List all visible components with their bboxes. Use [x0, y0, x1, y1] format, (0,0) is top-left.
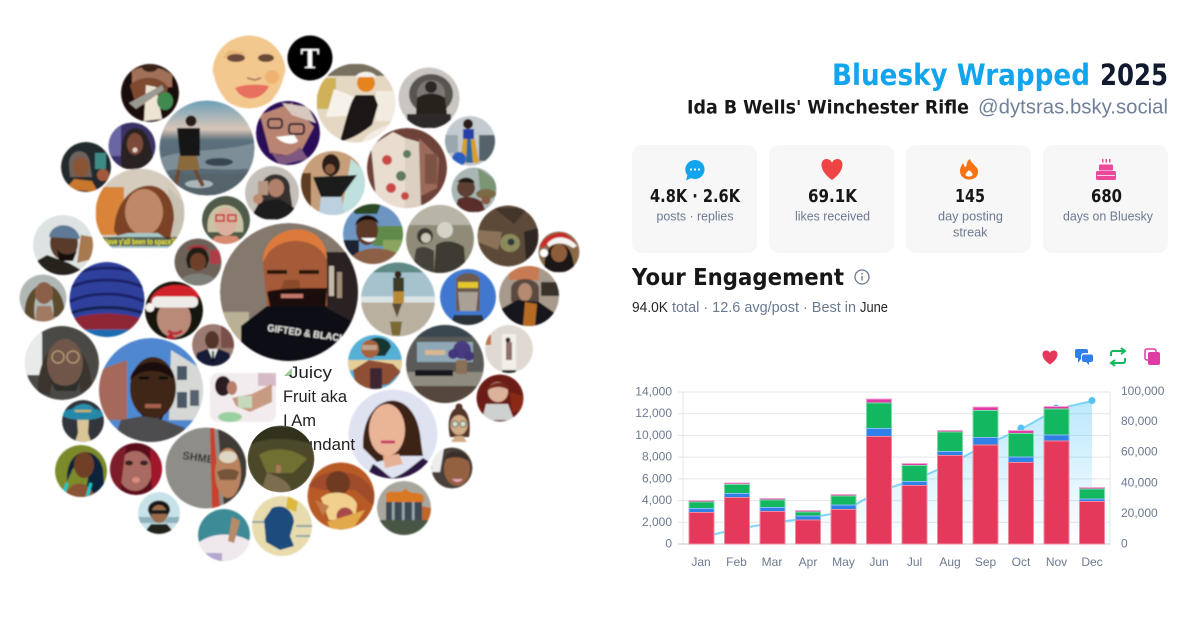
subtitle: display name and handle — [687, 96, 1168, 118]
avatar: woman in black blouse — [301, 151, 365, 215]
icon: flame — [960, 159, 978, 180]
engagement summary text: June — [860, 300, 888, 316]
title: Bluesky Wrapped — [832, 58, 1090, 92]
avatar: cartoon woman in santa hat — [538, 232, 580, 272]
avatar: woman with red hair — [110, 443, 162, 495]
avatar: smiling woman in room — [174, 238, 222, 286]
avatar: smiling woman close-up — [432, 448, 472, 488]
bar: Jan — [689, 500, 714, 544]
bar: Feb — [724, 483, 750, 544]
left axis labels: 2,000 — [642, 515, 672, 529]
avatar: man on beach — [361, 262, 435, 336]
avatar: tabby cat — [478, 206, 538, 266]
avatar: curly haired woman — [20, 274, 66, 322]
avatar: woman with machete — [121, 62, 179, 122]
avatar: woman portrait — [348, 390, 438, 479]
avatar: reclining woman, rounded photo — [210, 373, 276, 422]
subtitle: display name and handle: @dytsras.bsky.social — [978, 96, 1168, 118]
avatar fallback text: broken image alt — [283, 363, 355, 454]
avatar: purple selfie woman — [108, 122, 156, 170]
stat label: days on Bluesky — [1063, 209, 1153, 224]
month labels: Nov — [1046, 555, 1067, 569]
left axis labels: 0 — [665, 536, 672, 550]
avatar: toddler on red — [476, 374, 524, 422]
avatar: man in suit and glasses — [192, 324, 234, 366]
stat value: 680 — [1091, 186, 1122, 207]
avatar: grey sweatshirt and cartoon: SHME — [182, 450, 215, 466]
avatar: man holding rock — [452, 168, 496, 212]
bar: May — [831, 494, 856, 544]
avatar: woman in hood taking selfie — [245, 166, 299, 220]
month labels: May — [832, 555, 855, 569]
avatar: central man in GIFTED & BLACK shirt — [220, 223, 358, 361]
left axis labels: 12,000 — [635, 406, 672, 420]
panel: days on Bluesky — [1043, 145, 1168, 253]
right axis labels: 80,000 — [1121, 414, 1158, 428]
chart: monthly engagement — [635, 384, 1165, 569]
avatar: woman in teal hat — [62, 400, 104, 442]
month labels: Sep — [975, 555, 996, 569]
stat label — [938, 209, 1003, 240]
avatar: man selfie by building — [99, 338, 203, 442]
avatar fallback text: broken image alt: Juicy — [289, 363, 333, 382]
avatar: blueprint profile — [252, 496, 312, 556]
month labels: Dec — [1081, 555, 1103, 569]
month labels: Aug — [939, 555, 961, 569]
avatar: central man in GIFTED & BLACK shirt: GIFTED & BLACK — [267, 323, 347, 345]
engagement summary text: 94.0K — [632, 300, 668, 316]
stat label: likes received — [795, 209, 870, 224]
icon: cake — [1096, 159, 1116, 180]
avatar: man in beanie — [33, 215, 93, 275]
left axis labels: 14,000 — [635, 384, 672, 398]
stat value: 4.8K · 2.6K — [650, 186, 741, 207]
cumulative markers — [982, 397, 1096, 448]
stacked bars — [689, 399, 1104, 544]
avatar: forest landscape — [248, 426, 314, 492]
avatar fallback text: broken image alt: Fruit aka — [283, 387, 348, 406]
bar: Nov — [1044, 406, 1069, 544]
avatar: man with locs and glasses — [25, 326, 99, 400]
avatar fallback text: broken image alt: Abundant — [283, 435, 355, 454]
avatar: pumpkin-head woman on bed — [316, 64, 396, 142]
avatar: illustrated face — [212, 36, 286, 108]
month labels: Feb — [726, 555, 747, 569]
month labels: Jan — [691, 555, 711, 569]
avatar: window with flowers — [406, 325, 484, 403]
icon: heart — [822, 159, 842, 180]
bar: Mar — [760, 498, 785, 544]
avatar: woman with blue hair — [55, 445, 107, 497]
bar: Jul — [902, 464, 927, 544]
avatar: vintage couple — [406, 205, 474, 273]
left axis labels: 10,000 — [635, 428, 672, 442]
avatar: newspaper logo — [288, 36, 332, 80]
avatar: floral dress — [367, 128, 447, 208]
icon: info — [855, 270, 869, 284]
month labels — [691, 555, 1103, 569]
subtitle: display name and handle: Ida B Wells' Winchester Rifle — [687, 96, 969, 118]
bar: Oct — [1008, 430, 1034, 544]
avatar: woman in long skirt — [445, 116, 495, 166]
avatar: mirror selfie in white room — [485, 325, 533, 373]
right axis labels: 60,000 — [1121, 444, 1158, 458]
left axis labels — [635, 384, 672, 550]
right axis labels: 100,000 — [1121, 384, 1165, 398]
right axis labels: 40,000 — [1121, 476, 1158, 490]
bar: Sep — [973, 407, 998, 544]
avatar: sepia baby photo — [308, 462, 374, 530]
avatar: news anchor with caption: "Have y'all been to space?" — [100, 238, 178, 246]
avatar: newspaper logo: T — [301, 44, 320, 75]
avatar: smiling woman outdoors — [343, 204, 403, 264]
left axis labels: 6,000 — [642, 472, 672, 486]
avatar: blue quilt pattern — [70, 262, 144, 338]
avatar bubble cluster — [20, 36, 580, 561]
stat label: streak — [953, 225, 988, 240]
bar: Jun — [866, 399, 892, 544]
month labels: Mar — [762, 555, 782, 569]
panel: posts and replies — [632, 145, 757, 253]
left axis labels: 8,000 — [642, 450, 672, 464]
avatar: selfie with phone — [61, 142, 111, 192]
stat label: posts · replies — [656, 209, 734, 224]
month labels: Jun — [869, 555, 889, 569]
avatar: woman with glasses at shore — [138, 492, 180, 534]
right axis labels: 0 — [1121, 536, 1128, 550]
avatar: woman with red glasses — [202, 196, 250, 244]
icon: chat bubble — [685, 160, 705, 180]
title: 2025 — [1100, 58, 1168, 92]
icon: legend likes — [1043, 350, 1057, 364]
avatar: figure on bed, teal wall — [198, 509, 250, 561]
right axis labels — [1121, 384, 1165, 550]
chart legend icons — [1043, 348, 1160, 366]
engagement summary text: total · 12.6 avg/post · Best in — [672, 300, 856, 316]
avatar: woman with orange scarf — [499, 266, 559, 326]
avatar: burning building — [377, 481, 431, 535]
avatar: grey sweatshirt and cartoon — [166, 428, 246, 508]
avatar: man wading in ocean — [160, 100, 254, 196]
bar: Aug — [938, 430, 962, 544]
stat value: 69.1K — [808, 186, 858, 207]
stat label: day posting — [938, 209, 1003, 224]
month labels: Apr — [799, 555, 817, 569]
icon: legend reposts — [1111, 348, 1125, 366]
month labels: Jul — [907, 555, 922, 569]
avatar: man in yellow sunglasses — [440, 269, 496, 325]
avatar fallback text: broken image alt: I Am — [283, 411, 316, 430]
avatar: woman with sunglasses — [348, 335, 402, 389]
bar: Dec — [1080, 488, 1104, 544]
cumulative area — [701, 401, 1092, 544]
left axis labels: 4,000 — [642, 493, 672, 507]
panel: likes received — [769, 145, 894, 253]
stat value: 145 — [955, 186, 985, 207]
avatar: bearded man with glasses — [256, 101, 320, 165]
avatar: cartoon bitmoji — [449, 404, 470, 442]
bar: Apr — [796, 510, 820, 544]
avatar: news anchor with caption — [96, 168, 184, 258]
icon: legend replies — [1075, 349, 1093, 365]
cumulative line — [701, 401, 1092, 538]
grid lines — [678, 392, 1110, 544]
avatar: woman in santa hat — [145, 282, 203, 340]
icon: legend quotes — [1145, 349, 1160, 365]
panel: posting streak — [906, 145, 1031, 253]
heading: Your Engagement: Your Engagement — [631, 265, 844, 291]
month labels: Oct — [1012, 555, 1031, 569]
right axis labels: 20,000 — [1121, 506, 1158, 520]
avatar: black and white man in chair — [398, 68, 460, 128]
